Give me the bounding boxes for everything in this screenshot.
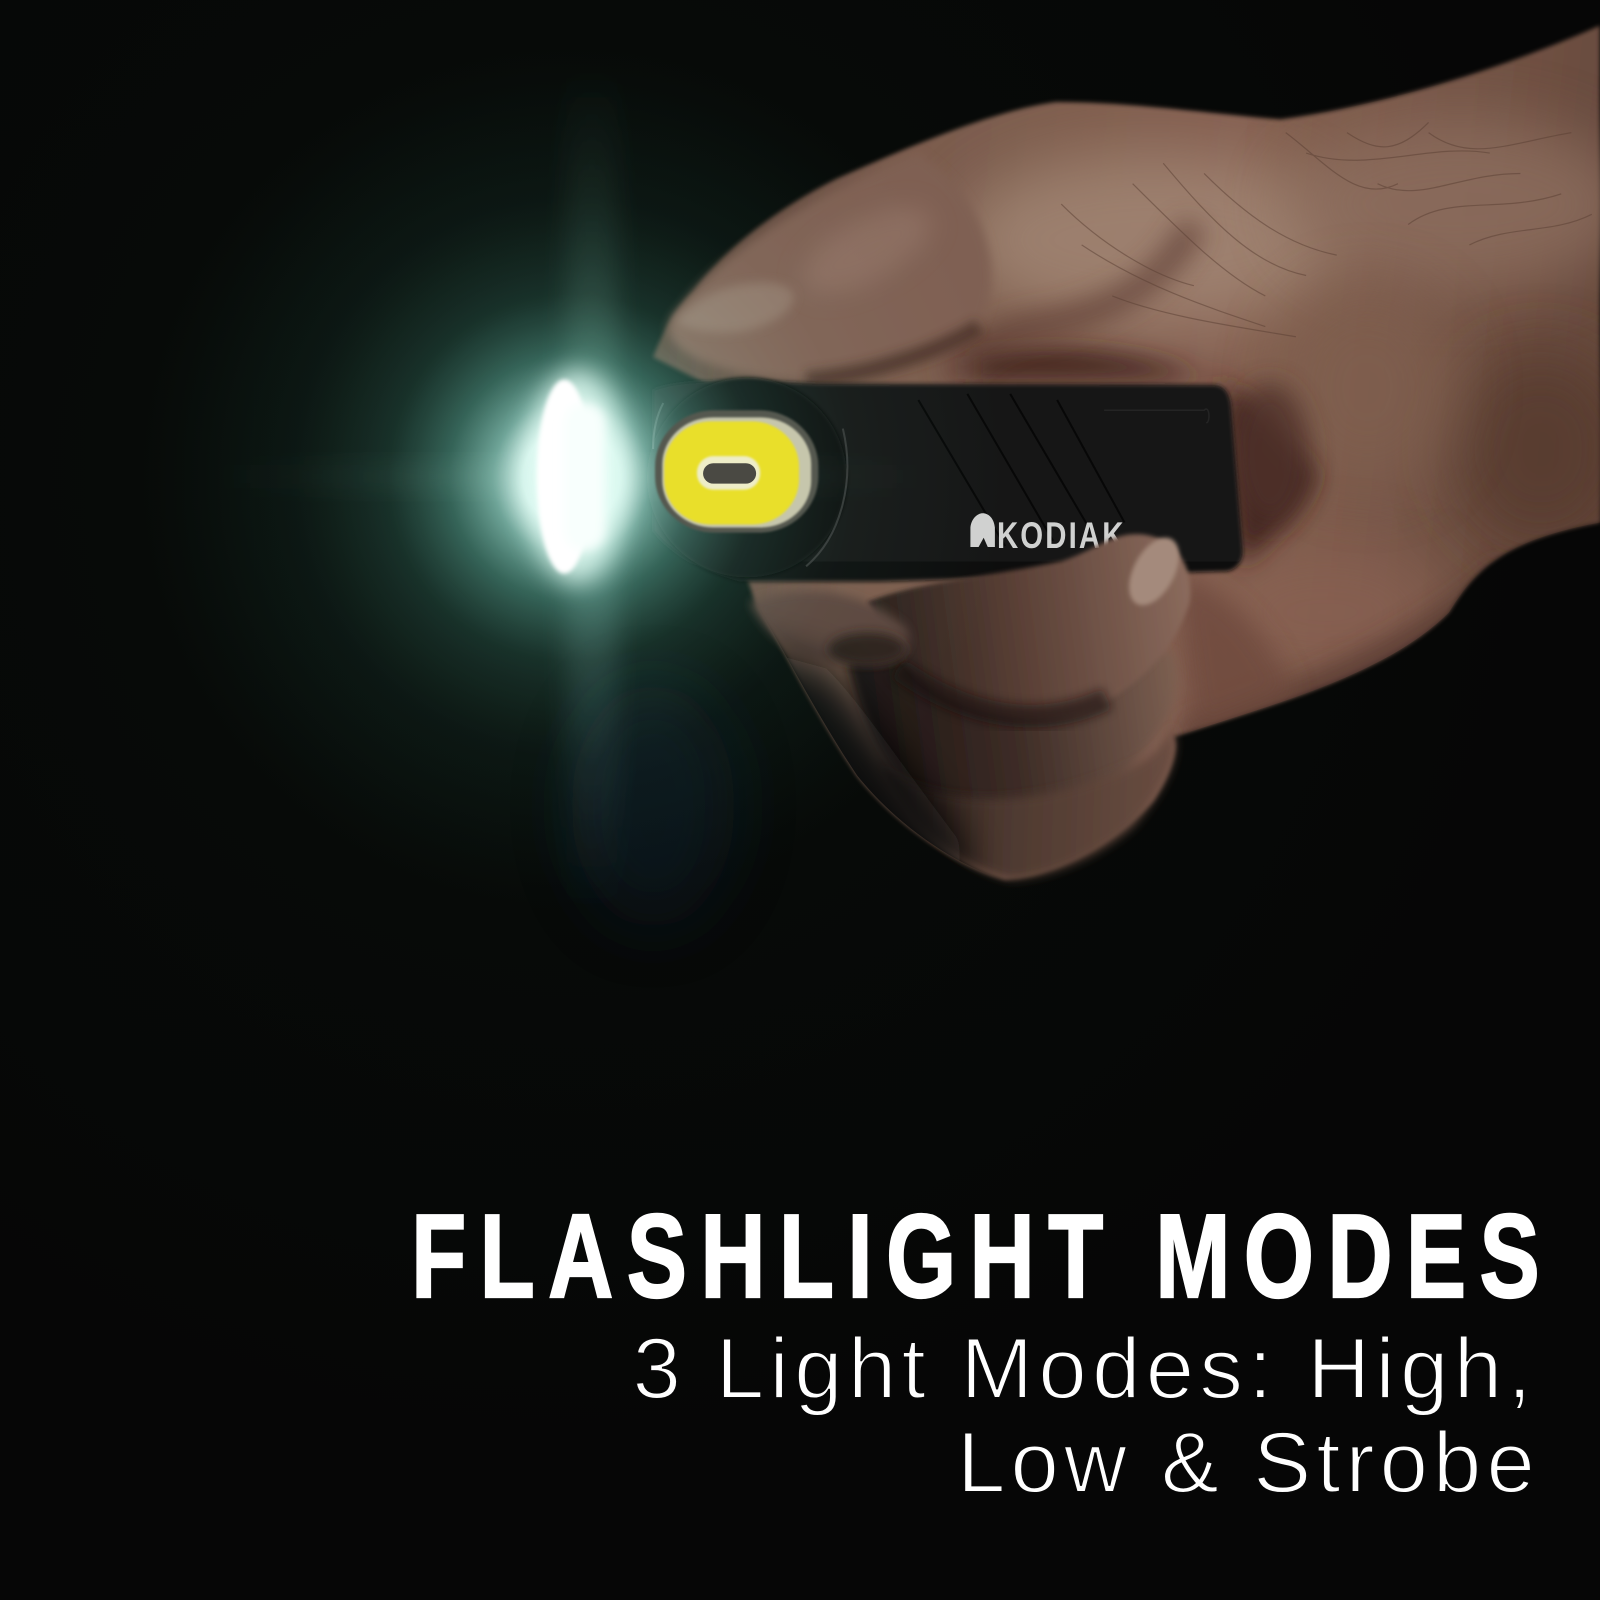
kodiak logo: KODIAK [997,516,1123,557]
title: FLASHLIGHT MODES [411,1191,1540,1323]
head ring [647,378,847,578]
COB yellow work light [655,410,818,533]
subtitle: Low & Strobe [957,1414,1535,1511]
middle finger [847,633,1177,809]
subtitle: 3 Light Modes: High, [633,1320,1532,1417]
shadow fading lower left of the fingers [770,626,984,872]
body ridges [918,394,1209,546]
thumb with nail [867,529,1190,719]
subtitle [633,1320,1535,1511]
index finger [668,153,992,380]
skin texture [1061,122,1592,337]
ring finger [878,727,1174,880]
hand holding the flashlight [653,26,1600,880]
light glow and lens flare [133,39,1010,918]
front finger, out of focus [750,592,909,665]
bright LED beam [526,370,628,583]
flashlight [647,378,1243,582]
